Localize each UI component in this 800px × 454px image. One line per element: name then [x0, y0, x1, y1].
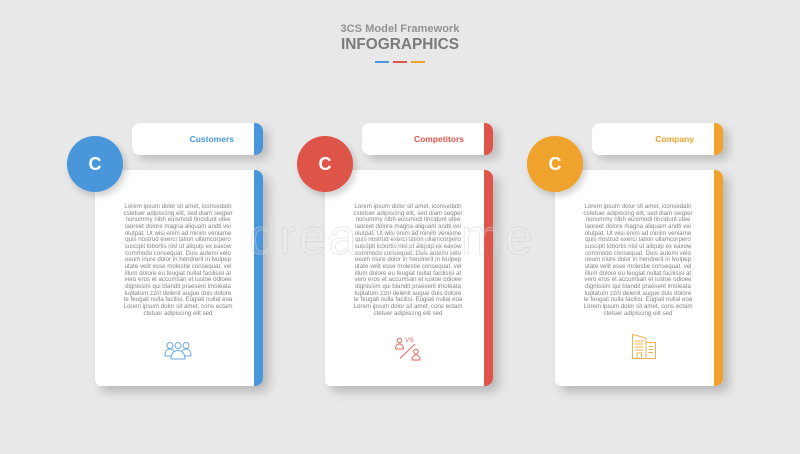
body text: commodo consequat. Duis autemi velo: [355, 250, 461, 257]
body text: ctetuer adipiscing elit sed: [604, 310, 672, 317]
body text: utate velit esse molestie consequat, vel: [355, 263, 461, 270]
icon: person versus person: VS: [405, 337, 414, 344]
label pill: company: Company: [655, 134, 694, 144]
body text: oeum iriure dolor in hendrerit in lvulpep: [125, 256, 231, 263]
card: [325, 170, 493, 386]
body text: utate velit esse molestie consequat, vel: [585, 263, 691, 270]
body text: cstetuer adipiscing elit, sed diam seqper: [583, 210, 693, 217]
circle badge: [67, 136, 123, 192]
body text: laoreet dolore magna aliquam andti vei: [125, 223, 231, 230]
title: INFOGRAPHICS: [341, 36, 459, 53]
icon: person versus person: [395, 337, 420, 360]
body text: Lorem ipsum dolor sit amet, iconsedatn: [354, 203, 462, 210]
body text: commodo consequat. Duis autemi velo: [585, 250, 691, 257]
icon: office buildings: [632, 334, 656, 359]
body text: vero eros et accumsan et iustoe odioee: [124, 276, 232, 283]
label pill: customers: Customers: [190, 134, 234, 144]
body text: luptatum zzril delenit augue duis dolore: [585, 290, 691, 297]
body text: illum dolore eu feugiat nullat facilisisi at: [355, 270, 461, 277]
body text: nonummy nibh euismodi tincidunt utee: [126, 216, 230, 223]
card: [95, 170, 263, 386]
body text: olutpat. Ut wisi enim ad minim veniame: [355, 230, 461, 237]
body text: Lorem ipsum dolor sit amet, cons ectam: [124, 303, 232, 310]
body text: Lorem ipsum dolor sit amet, cons ectam: [584, 303, 692, 310]
body text: commodo consequat. Duis autemi velo: [125, 250, 231, 257]
body text: Lorem ipsum dolor sit amet, cons ectam: [354, 303, 462, 310]
body text: [353, 203, 463, 317]
circle badge: C: [88, 154, 102, 174]
body text: oeum iriure dolor in hendrerit in lvulpep: [355, 256, 461, 263]
label pill: competitors: Competitors: [414, 134, 464, 144]
body text: suscipit lobortis nisl ut aliquip ex eaxow: [585, 243, 691, 250]
body text: Lorem ipsum dolor sit amet, iconsedatn: [124, 203, 232, 210]
body text: olutpat. Ut wisi enim ad minim veniame: [585, 230, 691, 237]
body text: illum dolore eu feugiat nullat facilisisi at: [125, 270, 231, 277]
panel: company: [527, 123, 734, 396]
label pill: competitors: [362, 123, 493, 155]
body text: dignissim qui blandit praesent lmoleata: [585, 283, 691, 290]
body text: ctetuer adipiscing elit sed: [144, 310, 212, 317]
label pill: company: [592, 123, 723, 155]
body text: dignissim qui blandit praesent lmoleata: [355, 283, 461, 290]
body text: luptatum zzril delenit augue duis dolore: [355, 290, 461, 297]
body text: luptatum zzril delenit augue duis dolore: [125, 290, 231, 297]
panel: competitors: [297, 123, 504, 396]
body text: quis nostrud exerci tation ullamcorpero: [355, 236, 461, 243]
body text: cstetuer adipiscing elit, sed diam seqper: [123, 210, 233, 217]
body text: illum dolore eu feugiat nullat facilisisi at: [585, 270, 691, 277]
body text: utate velit esse molestie consequat, vel: [125, 263, 231, 270]
body text: vero eros et accumsan et iustoe odioee: [354, 276, 462, 283]
body text: nonummy nibh euismodi tincidunt utee: [356, 216, 460, 223]
body text: olutpat. Ut wisi enim ad minim veniame: [125, 230, 231, 237]
body text: te feugait nulla facilisi. Eugiati nullal eoa: [584, 296, 692, 303]
label pill: customers: [132, 123, 263, 155]
colour dashes: [375, 61, 425, 63]
body text: te feugait nulla facilisi. Eugiati nullal eoa: [354, 296, 462, 303]
body text: laoreet dolore magna aliquam andti vei: [355, 223, 461, 230]
body text: [583, 203, 693, 317]
body text: oeum iriure dolor in hendrerit in lvulpep: [585, 256, 691, 263]
icon: people group: [164, 342, 192, 360]
circle badge: [297, 136, 353, 192]
body text: suscipit lobortis nisl ut aliquip ex eaxow: [355, 243, 461, 250]
body text: te feugait nulla facilisi. Eugiati nullal eoa: [124, 296, 232, 303]
circle badge: [527, 136, 583, 192]
body text: nonummy nibh euismodi tincidunt utee: [586, 216, 690, 223]
card: [555, 170, 723, 386]
body text: Lorem ipsum dolor sit amet, iconsedatn: [584, 203, 692, 210]
body text: vero eros et accumsan et iustoe odioee: [584, 276, 692, 283]
body text: quis nostrud exerci tation ullamcorpero: [125, 236, 231, 243]
body text: [123, 203, 233, 317]
header: [340, 23, 460, 63]
body text: suscipit lobortis nisl ut aliquip ex eaxow: [125, 243, 231, 250]
body text: quis nostrud exerci tation ullamcorpero: [585, 236, 691, 243]
subtitle: 3CS Model Framework: [340, 23, 459, 35]
watermark: dreamstime: [249, 209, 535, 265]
body text: dignissim qui blandit praesent lmoleata: [125, 283, 231, 290]
circle badge: C: [548, 154, 562, 174]
circle badge: C: [318, 154, 332, 174]
body text: laoreet dolore magna aliquam andti vei: [585, 223, 691, 230]
body text: ctetuer adipiscing elit sed: [374, 310, 442, 317]
body text: cstetuer adipiscing elit, sed diam seqper: [353, 210, 463, 217]
